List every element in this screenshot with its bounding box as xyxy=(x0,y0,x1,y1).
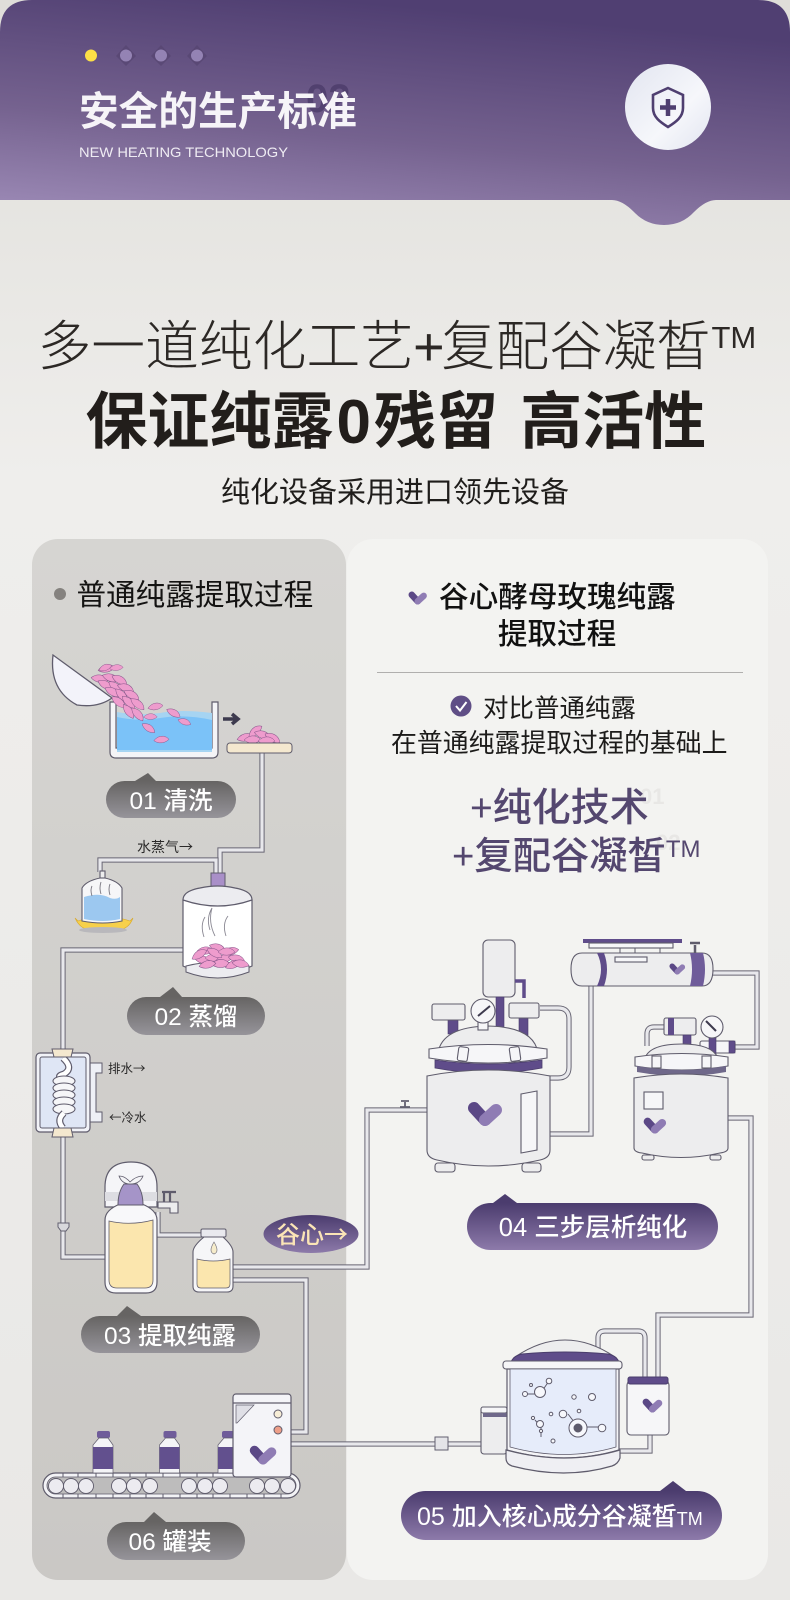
headline line 1: 多一道纯化工艺+复配谷凝皙 xyxy=(38,317,710,377)
step 01: washing xyxy=(52,655,292,818)
tag: guxin arrow: 谷心→ xyxy=(276,1215,348,1250)
icon: ingredient jar xyxy=(627,1377,669,1435)
step 02: distillation xyxy=(75,837,265,1035)
section title: 安全的生产标准 xyxy=(79,90,357,134)
icon: conveyor belt xyxy=(43,1473,300,1498)
label: step 02 xyxy=(127,987,265,1035)
label: step 03 xyxy=(81,1306,260,1353)
comparison note xyxy=(391,695,728,758)
purification highlights: +纯化技术 xyxy=(470,787,649,830)
icon: filling machine xyxy=(233,1394,291,1477)
right panel heading: 谷心酵母玫瑰纯露 xyxy=(439,581,676,614)
comparison note: 在普通纯露提取过程的基础上 xyxy=(391,729,728,758)
purification highlights: 01 xyxy=(640,784,664,809)
headline line 2: 保证纯露0残留 高活性 xyxy=(86,388,706,457)
purification highlights xyxy=(452,784,701,878)
left panel heading: 普通纯露提取过程 xyxy=(76,579,313,612)
icon: plate of petals xyxy=(227,723,292,753)
right panel heading: 提取过程 xyxy=(498,618,616,651)
icon: reactor small xyxy=(634,1016,735,1160)
label: step 04: 04 三步层析纯化 xyxy=(499,1214,687,1242)
step 06: filling xyxy=(43,1394,300,1560)
label: drain water: 排水→ xyxy=(108,1058,146,1077)
label: step 06: 06 罐装 xyxy=(128,1528,212,1556)
headline line 3: 纯化设备采用进口领先设备 xyxy=(221,476,569,509)
pipes: left panel xyxy=(58,753,306,1432)
label: step 06 xyxy=(107,1512,245,1560)
progress dots xyxy=(85,45,207,66)
panel: guxin process xyxy=(347,539,768,1580)
label: cold water: ←冷水 xyxy=(109,1107,147,1126)
label: step 03: 03 提取纯露 xyxy=(104,1322,236,1350)
icon: distillation vessel xyxy=(183,873,252,978)
icon: condenser xyxy=(36,1049,102,1137)
step 04: purification xyxy=(427,939,735,1250)
molecules xyxy=(522,1378,606,1443)
pipes: cross panel xyxy=(232,1101,482,1450)
purification highlights: +复配谷凝皙 xyxy=(452,835,666,878)
purification highlights: TM xyxy=(666,836,701,863)
label: step 02: 02 蒸馏 xyxy=(154,1003,238,1031)
ghost number: 02 xyxy=(306,77,350,121)
headline xyxy=(38,317,756,509)
icon: tank with water xyxy=(110,702,218,758)
steam label: 水蒸气→ xyxy=(137,837,193,857)
icon: shield xyxy=(625,64,711,150)
pipes: right panel xyxy=(540,973,757,1451)
icon: tap xyxy=(158,1192,178,1213)
arrow xyxy=(223,714,238,724)
headline line 1: TM xyxy=(711,320,756,355)
label: step 04 xyxy=(467,1194,718,1250)
icon: mixing tank xyxy=(503,1340,622,1473)
section subtitle: NEW HEATING TECHNOLOGY xyxy=(79,144,289,160)
icon: boiler xyxy=(75,871,133,933)
icon: reactor large xyxy=(427,940,550,1172)
icon: bowl of petals xyxy=(52,655,192,743)
icon: collection bottle xyxy=(105,1162,157,1293)
purification highlights: 02 xyxy=(656,830,680,855)
icon: collection jar xyxy=(193,1229,233,1292)
label: step 05 xyxy=(401,1481,722,1540)
label: step 01 xyxy=(106,773,236,818)
label: step 05: 05 加入核心成分谷凝皙TM xyxy=(417,1503,703,1531)
right panel heading xyxy=(412,581,676,651)
header banner xyxy=(0,0,790,225)
icon: left feed box xyxy=(481,1407,507,1454)
label: step 01: 01 清洗 xyxy=(129,787,213,815)
panel: ordinary process xyxy=(32,539,346,1580)
step 03: extraction xyxy=(81,1162,260,1353)
icon: bottles xyxy=(93,1431,238,1473)
comparison note: 对比普通纯露 xyxy=(483,695,636,723)
icon: chromatography column xyxy=(571,939,713,986)
step 05: add core ingredient xyxy=(401,1340,722,1540)
tag: guxin arrow xyxy=(264,1215,358,1253)
